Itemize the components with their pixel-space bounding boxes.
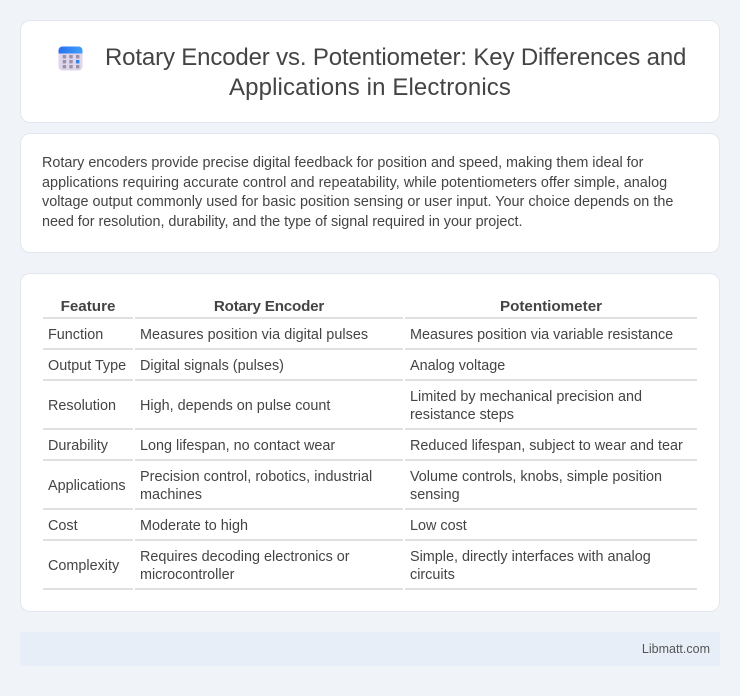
row: cost: Low cost <box>410 518 467 534</box>
row: resolution: High, depends on pulse count <box>140 398 330 414</box>
footer bar <box>20 632 720 666</box>
row: resolution: Resolution <box>48 398 116 414</box>
row: applications: Precision control, robotics, industrial <box>140 469 372 485</box>
row: output type: Output Type <box>48 358 126 374</box>
row: complexity: Simple, directly interfaces with analog <box>410 549 651 565</box>
intro text: need for resolution, durability, and the type of signal required in your project. <box>42 214 522 230</box>
table header: Feature <box>61 298 115 315</box>
row: cost <box>48 518 467 534</box>
intro text <box>42 155 673 230</box>
row: applications: machines <box>140 487 202 503</box>
intro text: voltage output commonly used for basic position sensing or user input. Your choice depends on the <box>42 194 673 210</box>
icon: calendar <box>58 46 82 70</box>
table header: Rotary Encoder <box>214 298 324 315</box>
row: applications <box>48 469 662 503</box>
row: resolution <box>48 389 642 423</box>
row: complexity: circuits <box>410 567 455 583</box>
title: Rotary Encoder vs. Potentiometer: Key Differences and <box>105 44 686 71</box>
row: applications: sensing <box>410 487 460 503</box>
table header: Potentiometer <box>500 298 602 315</box>
row: function <box>48 327 673 343</box>
row: durability <box>48 438 683 454</box>
row: durability: Long lifespan, no contact wear <box>140 438 335 454</box>
intro text: applications requiring accurate control and repeatability, while potentiometers offer simple, analog <box>42 175 667 191</box>
row: complexity: Requires decoding electronics or <box>140 549 350 565</box>
row: resolution: resistance steps <box>410 407 514 423</box>
panel: comparison table <box>20 273 720 612</box>
panel: intro summary <box>20 133 720 253</box>
intro text: Rotary encoders provide precise digital feedback for position and speed, making them ideal for <box>42 155 643 171</box>
title: Applications in Electronics <box>229 74 511 101</box>
row: function: Measures position via variable resistance <box>410 327 673 343</box>
row: applications: Applications <box>48 478 126 494</box>
row: applications: Volume controls, knobs, simple position <box>410 469 662 485</box>
row: durability: Durability <box>48 438 108 454</box>
row: function: Function <box>48 327 103 343</box>
footer credit: Libmatt.com <box>642 642 710 656</box>
panel: title card <box>20 20 720 123</box>
title <box>105 44 686 101</box>
table header <box>61 298 602 315</box>
row: complexity: Complexity <box>48 558 119 574</box>
row: function: Measures position via digital pulses <box>140 327 368 343</box>
row: output type: Digital signals (pulses) <box>140 358 284 374</box>
row: cost: Cost <box>48 518 78 534</box>
row: complexity <box>48 549 651 583</box>
row: durability: Reduced lifespan, subject to wear and tear <box>410 438 683 454</box>
row: complexity: microcontroller <box>140 567 234 583</box>
row: output type <box>48 358 505 374</box>
row: cost: Moderate to high <box>140 518 248 534</box>
row: output type: Analog voltage <box>410 358 505 374</box>
row: resolution: Limited by mechanical precision and <box>410 389 642 405</box>
